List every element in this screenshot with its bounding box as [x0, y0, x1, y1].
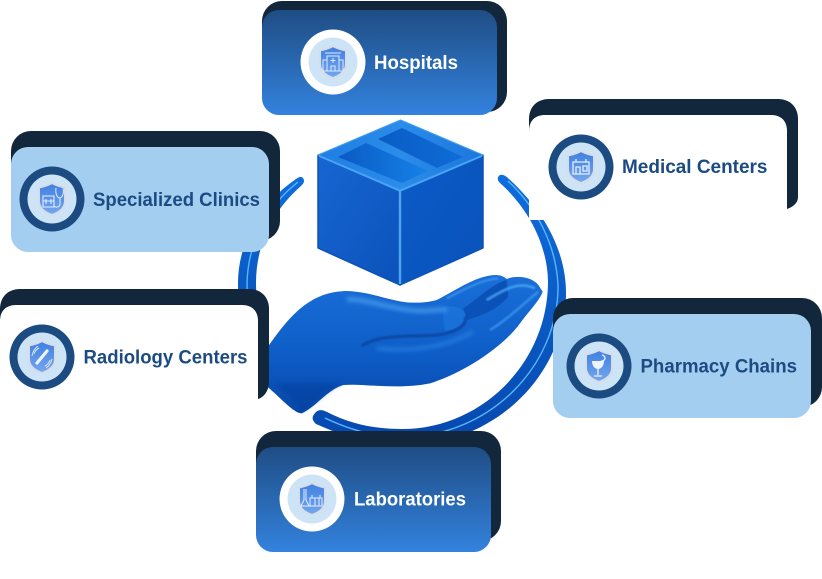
label: Laboratories: Laboratories — [354, 490, 466, 511]
icon: pharmacy shield — [566, 334, 632, 398]
card: laboratories — [256, 431, 501, 552]
ring: circular arc around the box and hand — [238, 175, 566, 446]
label: Medical Centers: Medical Centers — [622, 157, 768, 178]
card: medical centers — [529, 99, 798, 220]
icon: clinic stethoscope shield — [20, 166, 84, 232]
card: pharmacy chains — [553, 298, 822, 418]
icon: medical center shield — [548, 134, 614, 200]
icon: blue isometric box — [318, 120, 483, 285]
card: specialized clinics — [11, 131, 280, 252]
label: Pharmacy Chains: Pharmacy Chains — [640, 357, 797, 378]
icon: open blue hand — [263, 275, 543, 413]
icon: radiology shield — [10, 324, 74, 390]
label: Radiology Centers: Radiology Centers — [84, 348, 248, 368]
label: Specialized Clinics: Specialized Clinics — [93, 190, 260, 211]
card: radiology centers — [0, 289, 269, 410]
icon: laboratory shield — [280, 466, 344, 532]
card: hospitals — [262, 1, 507, 115]
label: Hospitals: Hospitals — [374, 53, 458, 74]
icon: hospital shield — [300, 30, 366, 94]
